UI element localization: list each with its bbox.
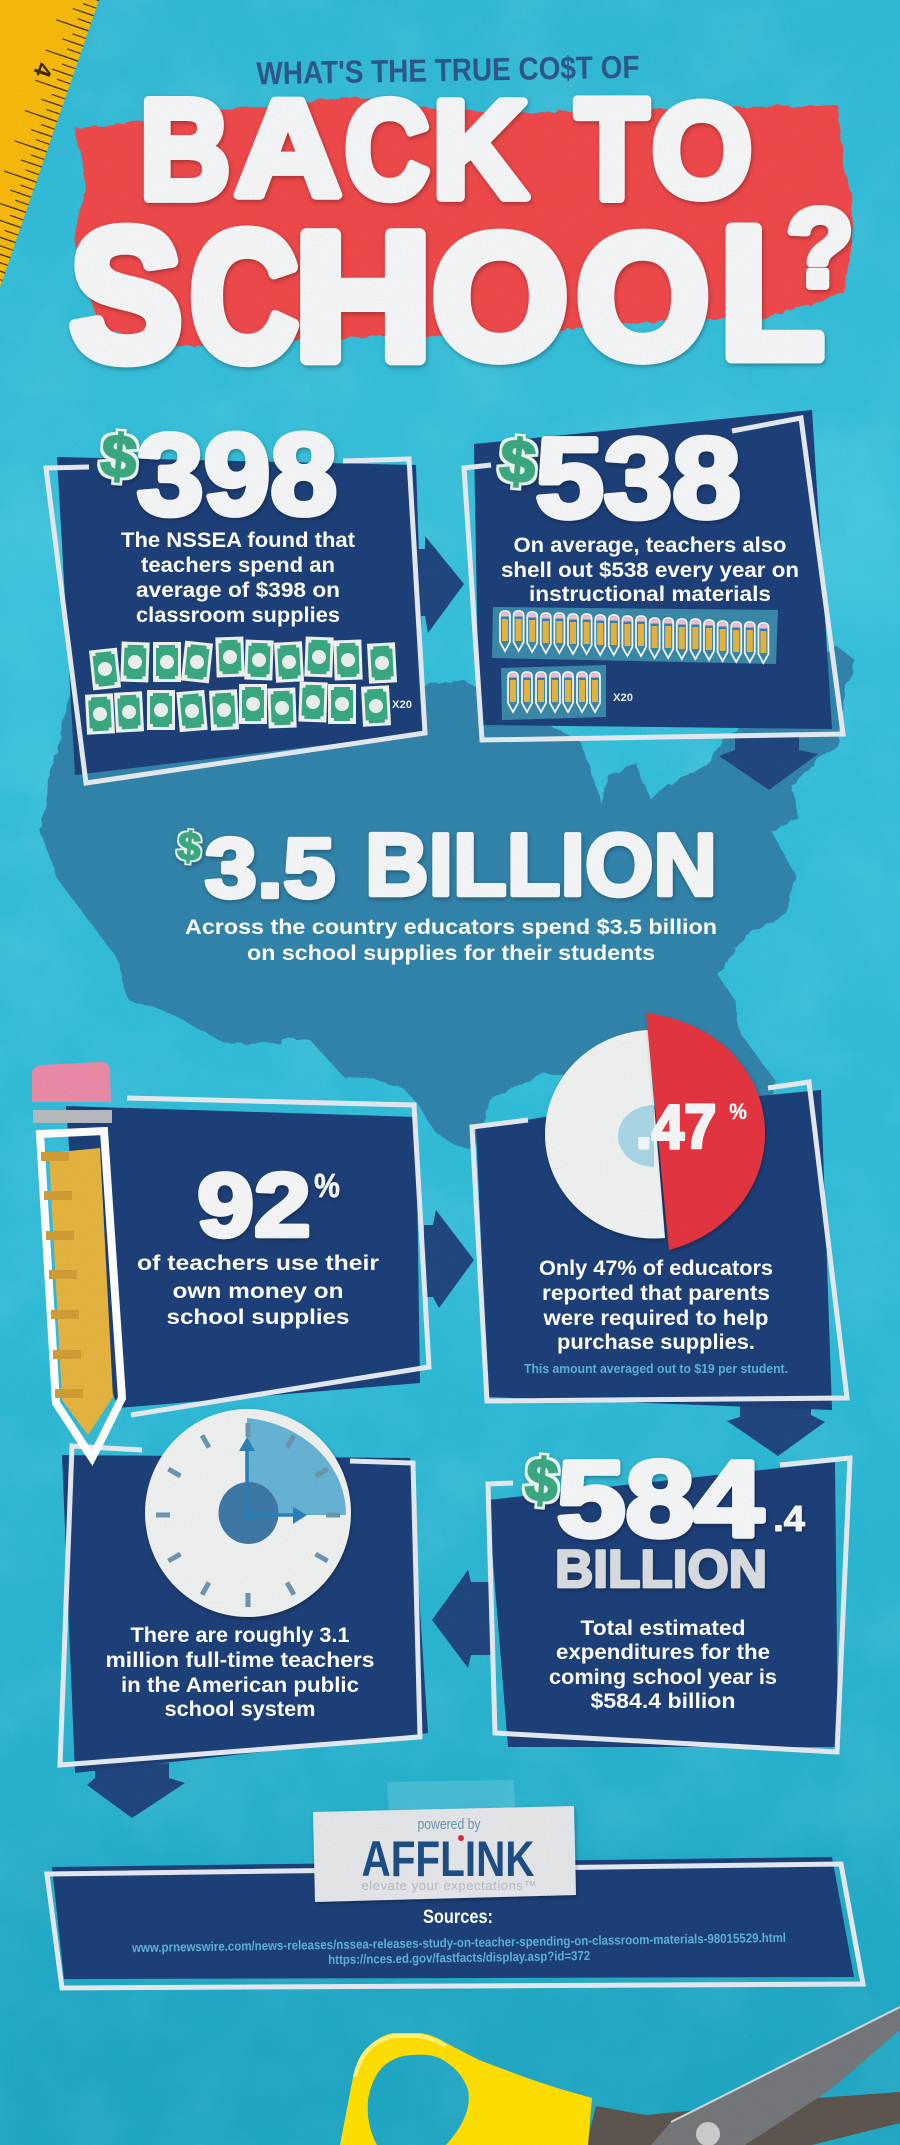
powered by: powered by xyxy=(418,1816,481,1833)
description: shell out $538 every year on xyxy=(501,559,799,582)
description: On average, teachers also xyxy=(514,534,786,557)
headline letters: O xyxy=(576,198,710,394)
icon: big pencil xyxy=(32,1062,122,1458)
headline letters: C xyxy=(190,195,298,398)
panel: 92% of teachers xyxy=(66,1098,429,1415)
description: school system xyxy=(164,1698,316,1721)
stat 92%: 92 xyxy=(197,1156,311,1256)
sources heading: Sources: xyxy=(423,1907,493,1928)
description xyxy=(121,529,355,627)
headline letters: H xyxy=(294,197,432,398)
description: expenditures for the xyxy=(556,1641,770,1664)
description: reported that parents xyxy=(542,1282,770,1305)
description: on school supplies for their students xyxy=(247,942,655,965)
icons: dollar bills xyxy=(85,637,397,735)
headline letters: T xyxy=(576,69,648,228)
description: purchase supplies. xyxy=(557,1331,755,1354)
stat $3.5 billion: 3.5 xyxy=(205,821,335,915)
stat $584.4 billion: .4 xyxy=(773,1498,805,1539)
pie chart: .47 xyxy=(636,1092,716,1161)
tagline: elevate your expectations™ xyxy=(362,1878,536,1893)
headline letters: O xyxy=(432,200,568,395)
description: coming school year is xyxy=(549,1666,777,1689)
description: teachers spend an xyxy=(141,554,335,577)
description xyxy=(539,1257,773,1354)
description xyxy=(549,1617,777,1713)
stat $538: $ xyxy=(497,427,538,497)
description: million full-time teachers xyxy=(106,1649,374,1672)
stat $584.4 billion: $ xyxy=(523,1446,561,1516)
headline letters: ? xyxy=(786,187,854,310)
Afflink wordmark: AFFLINK xyxy=(362,1831,534,1887)
headline letters: B xyxy=(140,71,230,229)
headline letters xyxy=(70,69,854,399)
footnote: This amount averaged out to $19 per student. xyxy=(524,1361,788,1376)
description xyxy=(137,1252,379,1329)
arrow: card 6 to card 5 xyxy=(432,1570,491,1668)
multiplier: X20 xyxy=(613,692,633,704)
headline letters: L xyxy=(720,189,824,397)
arrow: card 4 to card 6 xyxy=(727,1402,825,1456)
panel: $3.5 billion xyxy=(176,815,717,965)
description: The NSSEA found that xyxy=(121,529,355,552)
stat $3.5 billion xyxy=(176,815,717,915)
arrow: card 5 to sources xyxy=(87,1763,185,1818)
panel: 47% of educators xyxy=(472,1013,847,1410)
source links xyxy=(131,1930,786,1970)
tape xyxy=(387,1780,516,1832)
headline letters: K xyxy=(432,72,528,227)
icon: scissors xyxy=(340,2007,900,2145)
icon: clock xyxy=(145,1409,351,1617)
multiplier: X20 xyxy=(392,699,412,711)
icons: pencils row 2 xyxy=(501,665,606,720)
description: school supplies xyxy=(166,1306,350,1329)
description: in the American public xyxy=(121,1674,359,1697)
description xyxy=(501,534,799,606)
description: average of $398 on xyxy=(136,579,340,602)
stat $398: $ xyxy=(98,422,139,492)
stat $584.4 billion: BILLION xyxy=(555,1540,767,1599)
description: Across the country educators spend $3.5 billion xyxy=(185,916,717,939)
description: of teachers use their xyxy=(137,1252,379,1275)
logo card: Afflink xyxy=(313,1806,576,1902)
source links: https://nces.ed.gov/fastfacts/display.asp?id=372 xyxy=(328,1948,590,1967)
headline letters: A xyxy=(235,73,341,225)
icon: ruler xyxy=(0,0,99,287)
icon: ruler: 4 xyxy=(27,59,57,81)
pie chart: % xyxy=(729,1100,747,1124)
stat 92%: % xyxy=(314,1167,340,1204)
panel: $538 instructional materials xyxy=(464,410,843,740)
arrow: card 3 to card 4 xyxy=(424,1210,474,1308)
headline letters: S xyxy=(70,191,182,399)
description xyxy=(185,916,717,965)
description xyxy=(106,1624,374,1721)
stat $3.5 billion: $ xyxy=(176,823,203,870)
description: instructional materials xyxy=(529,583,771,606)
description: were required to help xyxy=(542,1307,768,1330)
pie chart xyxy=(545,1013,765,1250)
description: Total estimated xyxy=(580,1617,746,1640)
title block xyxy=(70,49,854,399)
headline letters: C xyxy=(345,73,429,227)
arrow: card 2 to map xyxy=(719,737,818,790)
red torn paper xyxy=(75,97,853,347)
description: There are roughly 3.1 xyxy=(130,1624,350,1647)
arrow: card 1 to card 2 xyxy=(416,536,464,633)
panel: sources xyxy=(47,1857,863,1988)
stat $584.4 billion xyxy=(523,1438,805,1599)
subtitle: WHAT'S THE TRUE CO$T OF xyxy=(256,49,640,91)
description: own money on xyxy=(172,1280,344,1303)
map of United States xyxy=(40,645,855,1150)
description: $584.4 billion xyxy=(590,1690,736,1713)
stat $538: 538 xyxy=(535,416,741,542)
panel: $584.4 billion xyxy=(488,1438,850,1752)
stat $584.4 billion: 584 xyxy=(557,1438,764,1559)
headline letters: O xyxy=(652,75,752,224)
description: Only 47% of educators xyxy=(539,1257,773,1280)
icons: pencils row 1 xyxy=(492,607,778,664)
panel: $398 classroom supplies xyxy=(46,410,425,783)
source links: www.prnewswire.com/news-releases/nssea-releases-study-on-teacher-spending-on-classroom-materials-98015529.html xyxy=(131,1930,786,1955)
stat $398: 398 xyxy=(137,410,337,538)
stat $3.5 billion: BILLION xyxy=(365,815,717,914)
panel: 3.1 million teachers xyxy=(60,1409,428,1773)
description: classroom supplies xyxy=(136,604,340,627)
